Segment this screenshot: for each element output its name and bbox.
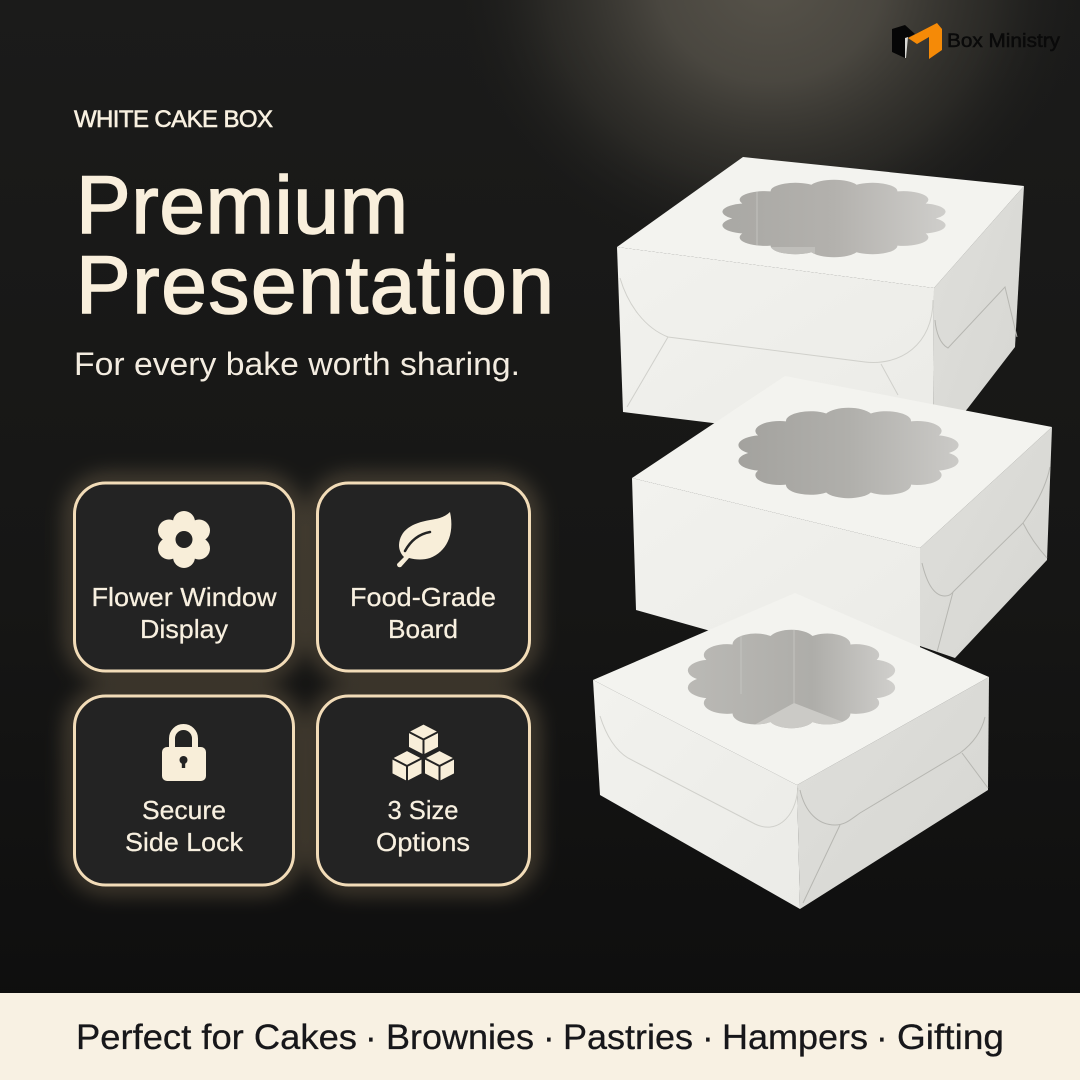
scalloped window: [688, 625, 895, 730]
product: large white cake box: [617, 157, 1024, 450]
banner text: ·: [543, 1018, 555, 1057]
label: Side Lock: [125, 827, 244, 857]
banner text: Gifting: [897, 1018, 1004, 1057]
title: Presentation: [76, 240, 554, 331]
logo wordmark: Box Ministry: [947, 31, 1061, 52]
title: Premium: [76, 160, 408, 251]
label: [92, 582, 277, 644]
card: 3 size options: [318, 696, 530, 885]
banner text: Pastries: [563, 1018, 693, 1057]
label: Display: [140, 614, 228, 644]
label: Food-Grade: [350, 582, 496, 612]
label: [376, 795, 470, 857]
banner text: Hampers: [722, 1018, 868, 1057]
card: flower window display: [74, 483, 294, 671]
banner text: ·: [702, 1018, 714, 1057]
feature cards: [74, 483, 530, 885]
card: food-grade board: [318, 483, 530, 671]
scalloped window: [738, 408, 959, 498]
banner text: ·: [876, 1018, 888, 1057]
icon: leaf: [397, 512, 451, 567]
icon: flower: [158, 511, 210, 568]
brand logo: [892, 23, 1061, 59]
label: Board: [388, 614, 458, 644]
banner text: [76, 1018, 1004, 1057]
label: Options: [376, 827, 470, 857]
icon: stacked cubes: [392, 724, 455, 782]
card glow: [74, 483, 530, 885]
logo icon: [892, 23, 942, 59]
label: Flower Window: [92, 582, 277, 612]
banner text: ·: [365, 1018, 377, 1057]
scalloped window: [722, 180, 946, 260]
label: Secure: [142, 795, 226, 825]
label: [125, 795, 244, 857]
subtitle: For every bake worth sharing.: [74, 346, 520, 382]
banner text: Brownies: [386, 1018, 534, 1057]
banner text: Perfect for Cakes: [76, 1018, 357, 1057]
card: secure side lock: [74, 696, 294, 885]
bottom banner: [0, 993, 1080, 1080]
label: 3 Size: [388, 795, 458, 825]
product: small white cake box: [593, 630, 989, 909]
product: medium white cake box: [632, 376, 1052, 690]
label: [350, 582, 496, 644]
eyebrow label: WHITE CAKE BOX: [74, 106, 273, 133]
title: [76, 160, 554, 331]
icon: padlock: [162, 727, 206, 781]
